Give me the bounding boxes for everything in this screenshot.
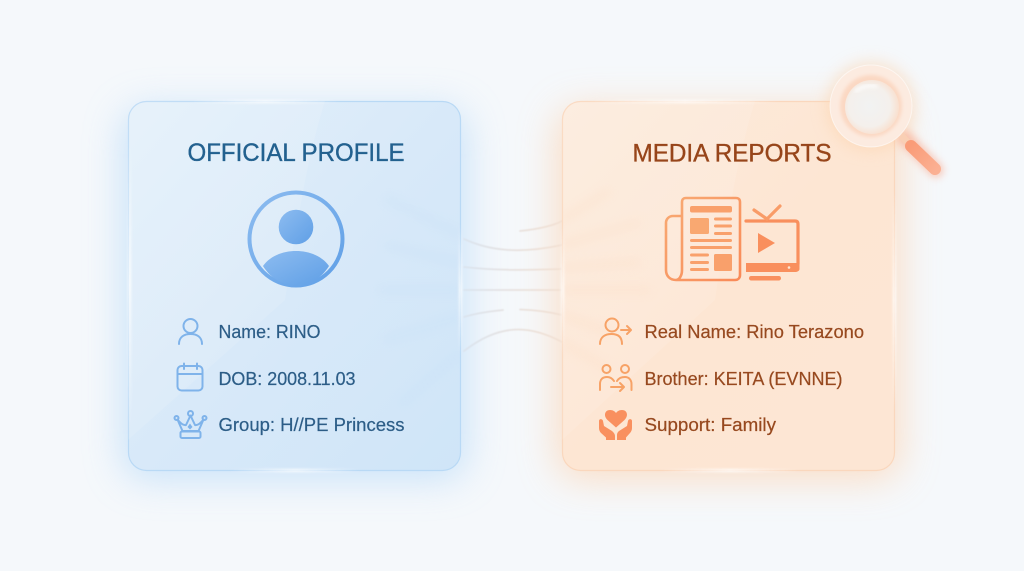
row: name <box>179 319 320 344</box>
text: support: Support: Family <box>644 415 776 435</box>
glass sheen: orange <box>562 101 755 440</box>
card surface: orange <box>562 102 894 470</box>
row: brother <box>600 365 842 391</box>
lens highlight <box>856 86 876 91</box>
glow: blue card <box>122 108 467 480</box>
icon: profile avatar <box>250 192 342 286</box>
magnifier glow <box>827 62 915 150</box>
glass sheen: blue <box>128 101 325 440</box>
light rays: blue <box>378 198 461 405</box>
magnifier frame <box>830 65 912 147</box>
icon: newspaper <box>666 198 740 280</box>
icon: siblings <box>600 365 632 391</box>
panel: media reports <box>561 100 896 472</box>
connecting lines between the cards <box>464 221 562 351</box>
icon: person with arrow <box>600 318 631 344</box>
icon: crown <box>174 411 206 438</box>
magnifier ring <box>840 75 902 137</box>
heading: official profile: OFFICIAL PROFILE <box>188 140 404 167</box>
card surface: blue <box>128 102 460 470</box>
row: group <box>174 411 404 438</box>
glow: orange card <box>556 108 901 480</box>
magnifier lens <box>845 80 899 134</box>
text: date of birth: DOB: 2008.11.03 <box>218 369 356 389</box>
text: name: Name: RINO <box>218 322 320 342</box>
panel: official profile <box>128 100 462 472</box>
edge highlights: orange <box>561 100 896 472</box>
heading: media reports: MEDIA REPORTS <box>632 140 832 168</box>
text: brother: Brother: KEITA (EVNNE) <box>644 369 842 389</box>
icon: magnifying glass <box>827 62 936 170</box>
row: real name <box>600 318 864 344</box>
light rays: orange <box>562 190 650 370</box>
row: support <box>599 410 776 440</box>
icon: heart in hands <box>599 410 632 440</box>
icon: calendar <box>178 364 202 390</box>
magnifier handle <box>911 146 935 169</box>
magnifier handle glow <box>905 138 936 170</box>
edge highlights: blue <box>128 100 462 472</box>
row: date of birth <box>178 364 356 390</box>
text: group: Group: H//PE Princess <box>218 415 404 435</box>
icon: television <box>746 206 800 280</box>
text: real name: Real Name: Rino Terazono <box>644 322 864 342</box>
magnifier neck <box>898 132 912 147</box>
icon: person <box>179 319 202 344</box>
